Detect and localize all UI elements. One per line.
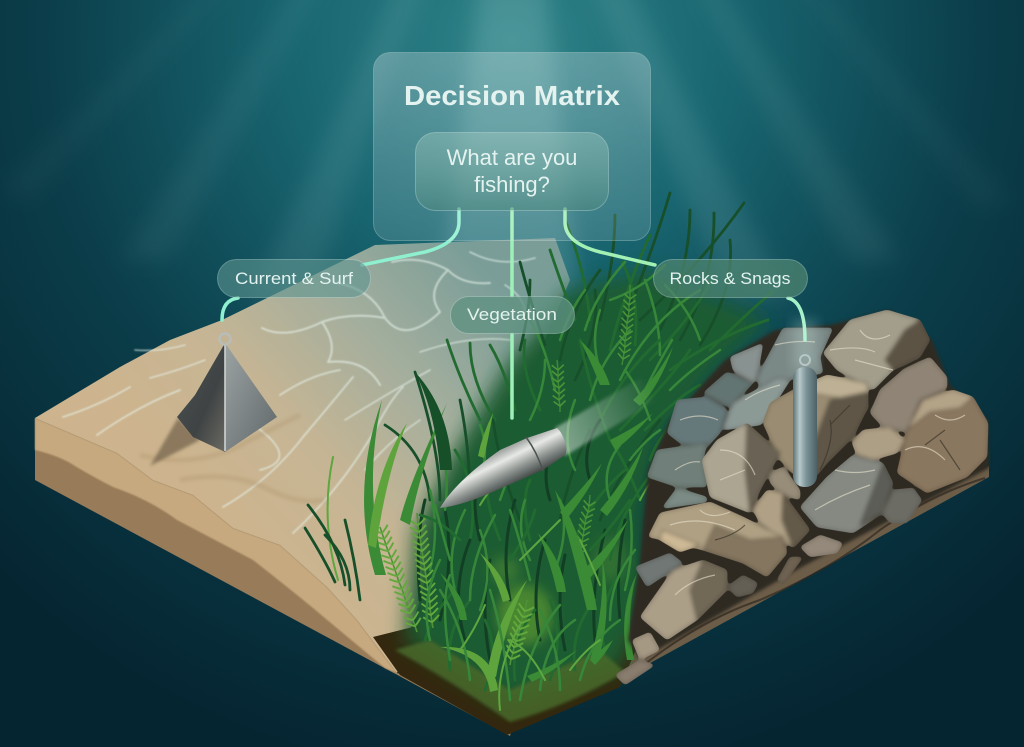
dense midground blades	[530, 265, 720, 420]
connector: current to pyramid sinker	[222, 298, 238, 320]
sand shadow	[150, 418, 200, 466]
rock highlights and cracks	[670, 330, 965, 595]
question box	[416, 132, 608, 210]
label: current and surf	[218, 260, 370, 298]
dark vegetation mass	[405, 270, 770, 706]
light rays	[0, 0, 1010, 300]
pyramid ridge	[224, 345, 226, 451]
back rocks, grey	[647, 328, 833, 508]
label: vegetation: Vegetation	[467, 306, 557, 324]
rock shelf edge	[600, 466, 989, 684]
soft sand ripple shading	[140, 415, 325, 501]
label: vegetation	[450, 296, 574, 334]
connector: to rocks and snags	[565, 209, 655, 265]
feathery water plants	[380, 285, 630, 665]
front blades	[305, 340, 673, 710]
connector: to vegetation	[510, 209, 514, 296]
pyramid left face	[177, 343, 225, 452]
cylinder sinker	[793, 320, 817, 487]
terrain top: sand surface	[35, 238, 570, 673]
connector: to current and surf	[362, 209, 459, 265]
rock pile	[615, 310, 989, 685]
tan rocks	[615, 310, 988, 685]
connector: rocks to cylinder sinker	[788, 298, 805, 340]
label: rocks and snags	[654, 260, 808, 298]
grass bed	[305, 193, 772, 735]
soil tip	[373, 600, 640, 735]
terrain side: sand cliff lower layer	[35, 418, 520, 736]
sand ripples and light caustics	[63, 252, 535, 533]
panel: decision matrix	[374, 52, 650, 240]
cylinder ring	[800, 355, 810, 365]
bullet sinker	[440, 378, 665, 508]
pyramid sinker	[150, 334, 277, 466]
mossy floor	[395, 640, 625, 722]
heading: Decision Matrix	[404, 80, 620, 111]
question text: fishing?	[474, 172, 550, 197]
pyramid right face	[225, 343, 277, 452]
terrain base	[35, 238, 989, 736]
label: current and surf: Current & Surf	[235, 270, 353, 288]
bullet body	[440, 428, 566, 508]
connector: vegetation to bullet sinker	[510, 334, 514, 418]
motion streak	[555, 378, 665, 456]
bright central foliage	[491, 538, 626, 645]
label: rocks and snags: Rocks & Snags	[670, 270, 790, 288]
back blades	[385, 193, 772, 690]
glow above sinker	[793, 320, 817, 370]
bullet groove	[526, 437, 543, 471]
dark crevice mass	[628, 310, 989, 660]
terrain side: sand cliff upper layer	[35, 418, 397, 673]
cylinder body	[793, 367, 817, 487]
question text: What are you	[447, 145, 577, 170]
pyramid ring	[220, 334, 230, 344]
glass card	[374, 52, 650, 240]
